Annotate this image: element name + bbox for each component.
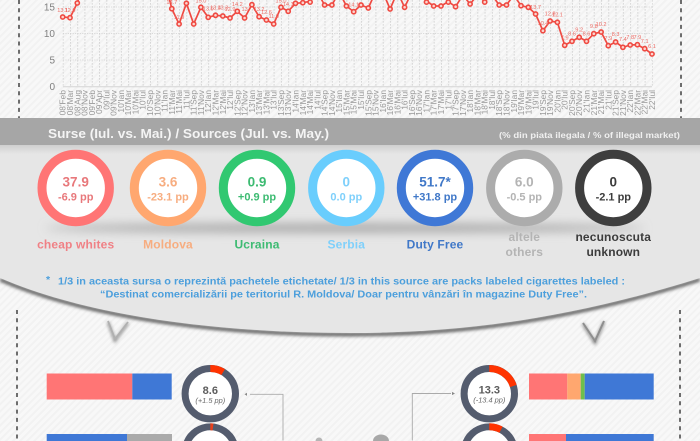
x axis labels: 10'Mai: [130, 90, 140, 114]
x axis labels: 15'Mai: [349, 90, 359, 114]
x axis labels: 11'Iul: [181, 90, 191, 109]
x axis labels: 18'Nov: [502, 89, 512, 116]
x axis labels: 12'Ian: [203, 90, 213, 113]
x axis labels: 13'Sep: [276, 90, 286, 116]
data value labels: 12.9: [65, 8, 75, 14]
x axis labels: 22'Mai: [640, 90, 650, 114]
donut: right 1: [464, 368, 514, 419]
x axis labels: 16'Nov: [414, 89, 424, 116]
x axis labels: 18'Ian: [465, 90, 475, 113]
line chart: [44, 0, 657, 116]
data value labels: 14.2: [232, 2, 243, 8]
source: Ucraina: [223, 154, 291, 252]
source: necunoscuta / unknown: 0: [610, 175, 617, 190]
x axis labels: 17'Ian: [422, 90, 432, 113]
x axis labels: 19'Mar: [516, 90, 526, 115]
x axis labels: 08'Nov: [80, 89, 90, 116]
x axis labels: 19'Ian: [509, 90, 519, 113]
x axis labels: 21'Ian: [582, 90, 592, 113]
x axis labels: 11'Mar: [167, 90, 177, 115]
source: altele / others: 6.0: [515, 175, 534, 190]
data markers: [61, 0, 654, 56]
stacked bar: left 1: [47, 374, 172, 400]
data value labels: 7.9: [604, 36, 612, 42]
footnote: [46, 274, 625, 300]
source: Ucraina: 0.9: [248, 175, 266, 190]
data value labels: 7.9: [561, 36, 569, 42]
x axis labels: 10'Ian: [116, 90, 126, 113]
x axis labels: 09'Feb: [87, 90, 97, 115]
x axis labels: 14'Ian: [290, 90, 300, 113]
source: cheap whites: -6.9 pp: [58, 192, 94, 204]
x axis labels: 10'Iul: [138, 90, 148, 110]
source: necunoscuta / unknown: -2.1 pp: [596, 192, 631, 204]
donut: left 1: 8.6: [203, 385, 218, 397]
data value labels: 14.1: [348, 2, 359, 8]
data value labels: 8.6: [568, 32, 576, 38]
source: Duty Free: Duty Free: [407, 238, 464, 252]
data value labels: 12.9: [225, 7, 235, 13]
x axis labels: 13'Nov: [283, 89, 293, 116]
source: cheap whites: [37, 154, 114, 252]
data value labels: 10.2: [596, 22, 607, 28]
footnote: 1/3 in aceasta sursa o reprezintă pachetele etichetate/ 1/3 in this source are packs labeled cigarettes labeled :: [58, 276, 625, 288]
x axis labels: 15'Sep: [363, 90, 373, 116]
x axis labels: 17'Sep: [451, 90, 461, 116]
data value labels: 13: [241, 7, 248, 13]
y axis labels: [44, 2, 55, 93]
data value labels: 13.2: [254, 7, 265, 13]
x axis labels: 12'Mai: [218, 90, 228, 114]
sources panel: [0, 145, 700, 333]
data value labels: 13.4: [210, 6, 221, 12]
x axis labels: 19'Sep: [538, 90, 548, 116]
x axis labels: 21'Mar: [589, 90, 599, 115]
x axis labels: 21'Iul: [603, 90, 613, 110]
data value labels: 12.6: [261, 10, 272, 16]
arrow: right chevron: [583, 321, 604, 343]
donut: right 1: 13.3: [479, 384, 500, 396]
x axis labels: 22'Mar: [632, 90, 642, 115]
x axis labels: 17'Nov: [458, 89, 468, 116]
x axis labels: 19'Iul: [531, 90, 541, 110]
y axis labels: 15: [44, 2, 55, 14]
source: Ucraina: Ucraina: [234, 238, 280, 252]
source: Duty Free: +31.8 pp: [413, 192, 457, 204]
footnote: *: [46, 274, 51, 286]
x axis labels: 22'Iul: [647, 90, 657, 110]
x axis labels: 09'Apr: [94, 90, 104, 114]
x axis labels: 15'Iul: [356, 90, 366, 110]
source: necunoscuta / unknown: necunoscuta: [575, 230, 651, 244]
x axis labels: 21'Mai: [596, 90, 606, 114]
data value labels: 14.1: [283, 2, 294, 8]
data value labels: 6.1: [648, 44, 656, 50]
source: Duty Free: 51.7*: [419, 175, 452, 190]
donut: left 1: (+1.5 pp): [195, 396, 226, 405]
source: altele / others: -0.5 pp: [507, 192, 542, 204]
x axis labels: 10'Mar: [123, 90, 133, 115]
x axis labels: 14'Sep: [320, 90, 330, 116]
y axis labels: 10: [44, 29, 55, 40]
source: cheap whites: 37.9: [63, 175, 89, 190]
stacked bar: right 2: [529, 434, 654, 441]
x axis labels: 20'Sep: [567, 90, 577, 116]
x axis labels: 22'Ian: [625, 90, 635, 113]
y axis labels: 5: [49, 56, 55, 66]
x axis labels: 20'Iul: [560, 90, 570, 110]
x axis labels: 16'Sep: [407, 90, 417, 116]
x axis labels: 16'Mai: [392, 90, 402, 114]
x axis labels: 11'Mai: [174, 90, 184, 114]
x axis labels: 19'Mai: [523, 90, 533, 114]
donut: right 1: (-13.4 pp): [473, 396, 506, 404]
stacked bar: left 2: [47, 434, 172, 441]
footnote: “Destinat comercializării pe teritoriul R. Moldova/ Doar pentru vânzări în magazine Duty Free”.: [100, 288, 587, 300]
x axis labels: 20'Nov: [574, 89, 584, 116]
source: altele / others: others: [506, 245, 543, 259]
source: Ucraina: +0.9 pp: [238, 192, 276, 204]
donut: left 1: [185, 368, 236, 419]
x axis labels: 14'Nov: [327, 89, 337, 116]
x axis labels: 12'Mar: [210, 90, 220, 115]
data line: [63, 0, 652, 54]
data value labels: [57, 0, 656, 50]
data value labels: 14.7: [166, 0, 177, 6]
x axis labels: 14'Mai: [305, 90, 315, 114]
x axis labels: 17'Iul: [443, 90, 453, 110]
x axis labels: 12'Nov: [240, 89, 250, 116]
data value labels: 7.9: [634, 35, 641, 41]
data value labels: 10.4: [537, 21, 548, 27]
x axis labels: 11'Sep: [189, 90, 199, 115]
data value labels: 7.1: [641, 39, 649, 45]
x axis labels: 15'Ian: [334, 90, 344, 113]
icon: left person head: [316, 438, 322, 441]
data value labels: 8.6: [583, 32, 590, 38]
data value labels: 8.3: [612, 32, 619, 38]
source: Moldova: -23.1 pp: [147, 192, 189, 204]
unit note: (% din piata ilegala / % of illegal market): [499, 130, 680, 140]
data value labels: 9.2: [575, 28, 583, 34]
data value labels: 11.9: [174, 15, 184, 21]
source: Serbia: [313, 154, 380, 252]
stacked bar: right 1: [529, 374, 654, 400]
x axis labels: 09'Nov: [109, 89, 119, 116]
x axis labels: 13'Mai: [261, 90, 271, 114]
x axis labels: 12'Sep: [232, 90, 242, 116]
source: cheap whites: cheap whites: [37, 238, 114, 252]
source: altele / others: altele: [509, 230, 540, 244]
source: necunoscuta / unknown: [575, 154, 651, 259]
x axis labels: 18'Mai: [480, 90, 490, 114]
x axis labels: 18'Sep: [494, 90, 504, 116]
x axis labels: 20'Ian: [552, 90, 562, 113]
x axis labels: 08'Mar: [65, 90, 75, 115]
x axis labels: 16'Ian: [378, 90, 388, 113]
x axis labels: 21'Sep: [611, 90, 621, 116]
x axis labels: 13'Mar: [254, 90, 264, 115]
x axis labels: 17'Mai: [436, 90, 446, 114]
source: Moldova: [134, 154, 202, 252]
x axis labels: 15'Nov: [370, 89, 380, 116]
arrow: left chevron: [108, 321, 128, 341]
source: Moldova: Moldova: [143, 238, 193, 252]
x axis labels: 11'Ian: [160, 90, 170, 112]
x axis labels: 14'Iul: [312, 90, 322, 110]
source: altele / others: [491, 154, 558, 259]
connector: right arrow: [412, 392, 455, 440]
source: Serbia: 0: [343, 175, 350, 190]
x axis labels: 14'Mar: [298, 90, 308, 115]
header band: [0, 118, 700, 145]
data value labels: 7.8: [626, 35, 634, 41]
connector: left arrow: [244, 393, 283, 440]
curved panel shadow: [0, 280, 700, 334]
x axis labels: 18'Mar: [472, 90, 482, 115]
x axis labels: 13'Ian: [247, 90, 257, 113]
x axis labels: 17'Mar: [429, 90, 439, 115]
donut: right 2: [463, 423, 516, 441]
y axis labels: 0: [49, 82, 55, 93]
data value labels: 12.1: [552, 12, 563, 18]
data value labels: 13.3: [217, 6, 228, 12]
data value labels: 13.7: [530, 5, 541, 11]
x axis labels: 13'Iul: [269, 90, 279, 110]
data value labels: 7.4: [619, 37, 627, 43]
x axis labels: 10'Nov: [152, 89, 162, 116]
x axis labels: [58, 89, 657, 116]
x axis labels: 15'Mar: [341, 90, 351, 115]
x axis labels: 16'Iul: [400, 90, 410, 110]
x axis labels: 08'Aug: [72, 90, 82, 116]
x axis labels: 18'Iul: [487, 90, 497, 110]
donut: left 2: [184, 423, 237, 441]
x axis labels: 12'Iul: [225, 90, 235, 110]
x axis labels: 09'Iul: [101, 90, 111, 110]
data value labels: 9.8: [590, 24, 598, 30]
source: Serbia: Serbia: [328, 238, 365, 252]
x axis labels: 11'Nov: [196, 89, 206, 115]
x axis labels: 08'Feb: [58, 90, 68, 115]
circles shadow: [45, 224, 645, 232]
data value labels: 11.9: [268, 14, 279, 20]
x axis labels: 16'Mar: [385, 90, 395, 115]
data value labels: 12.8: [545, 12, 556, 18]
source: Moldova: 3.6: [159, 175, 178, 190]
data value labels: 13.0: [203, 6, 214, 12]
source: necunoscuta / unknown: unknown: [586, 245, 640, 259]
icon: right person head: [373, 434, 389, 441]
x axis labels: 10'Sep: [145, 90, 155, 116]
source: Duty Free: [401, 154, 469, 252]
source: Serbia: 0.0 pp: [330, 192, 362, 204]
data value labels: 13.1: [57, 8, 68, 14]
x axis labels: 19'Nov: [545, 89, 555, 116]
x axis labels: 21'Nov: [618, 89, 628, 116]
heading: Surse (Iul. vs. Mai.) / Sources (Jul. vs. May.): [48, 127, 329, 141]
